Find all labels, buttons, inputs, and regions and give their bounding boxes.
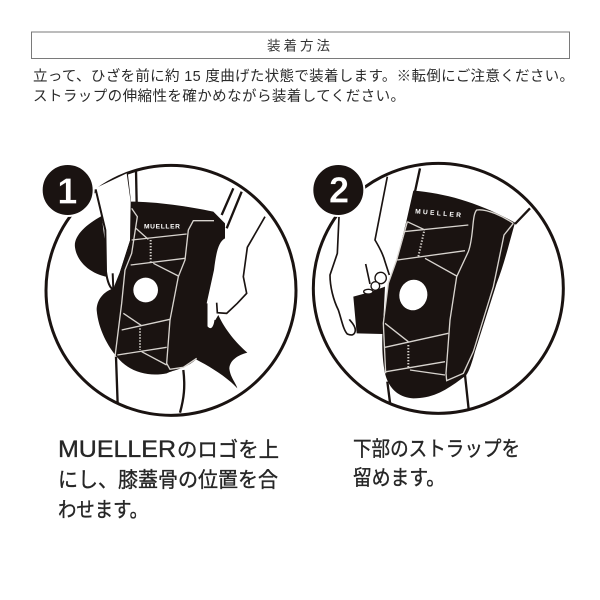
brand logo: MUELLER xyxy=(415,208,461,219)
brand logo: MUELLER xyxy=(144,224,180,231)
illustration 1: putting on the brace xyxy=(42,164,296,415)
caption step 1: わせます。 xyxy=(58,499,148,522)
number badge 1 xyxy=(42,164,94,216)
thigh and calf outlines xyxy=(116,170,242,413)
caption step 2 xyxy=(353,438,520,490)
illustration 2: fastening the lower strap xyxy=(312,163,563,413)
number badge 2: 2 xyxy=(329,170,349,211)
right hand outline xyxy=(207,217,265,329)
number badge 1: 1 xyxy=(57,170,77,211)
kneecap opening xyxy=(133,278,158,302)
heading box: 装着方法 xyxy=(267,38,333,54)
caption step 1 xyxy=(58,436,279,522)
caption step 2: 留めます。 xyxy=(353,467,445,490)
brace flap left xyxy=(75,216,109,277)
left hand outline xyxy=(96,189,113,289)
instruction text: 立って、ひざを前に約 15 度曲げた状態で装着します。※転倒にご注意ください。 xyxy=(33,67,574,85)
instruction text: ストラップの伸縮性を確かめながら装着してください。 xyxy=(33,88,405,105)
heading box xyxy=(32,32,570,58)
kneecap opening xyxy=(396,277,430,313)
thigh and calf outlines xyxy=(387,168,530,409)
brace body xyxy=(97,202,247,388)
circle frame 1 xyxy=(46,165,296,415)
fingers gripping strap xyxy=(364,272,386,294)
brace body xyxy=(382,191,515,398)
caption step 1: MUELLER xyxy=(58,436,176,463)
hand outline xyxy=(330,177,389,335)
left hand xyxy=(95,173,131,289)
caption step 1: のロゴを上 xyxy=(177,439,279,462)
caption step 2: 下部のストラップを xyxy=(353,438,520,461)
brace flap xyxy=(353,287,385,334)
instruction text xyxy=(33,67,574,105)
number badge 2 xyxy=(312,164,364,216)
strap lines xyxy=(383,210,513,381)
strap lines xyxy=(115,208,214,369)
caption step 1: にし、膝蓋骨の位置を合 xyxy=(58,469,278,492)
circle frame 2 xyxy=(313,163,563,413)
